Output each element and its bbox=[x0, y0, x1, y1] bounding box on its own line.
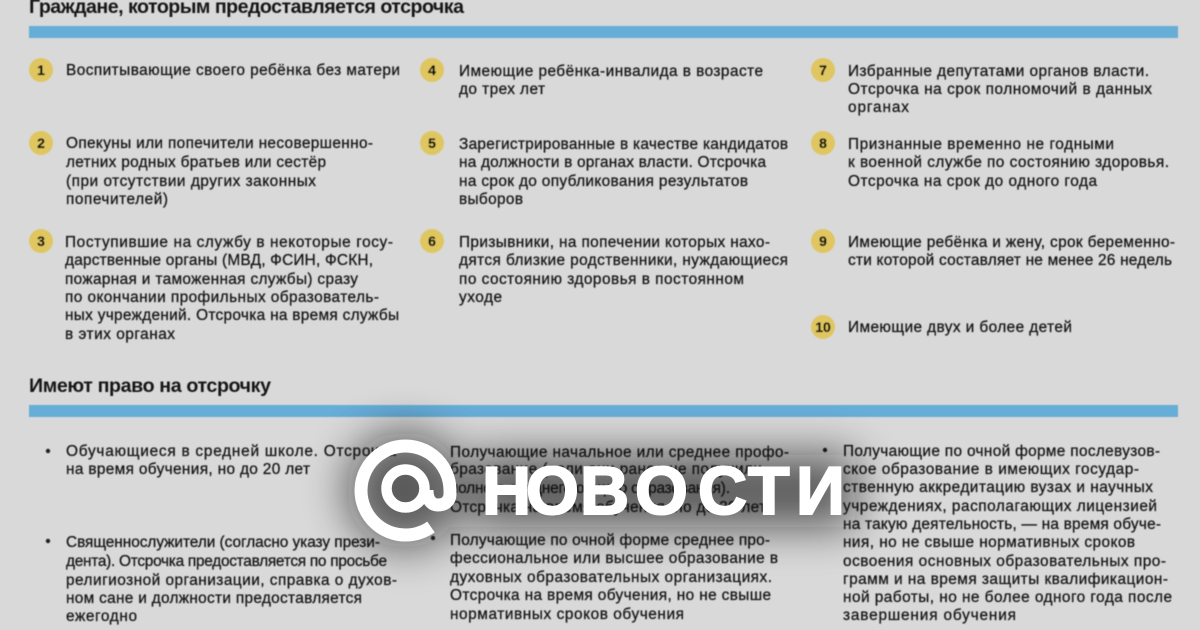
item 5 bbox=[420, 131, 788, 208]
item 8: 8 bbox=[819, 135, 827, 151]
item 5: на срок до опубликования результатов bbox=[459, 173, 748, 190]
bullet: postgraduate: грамм и на время защиты квалификацион- bbox=[843, 571, 1168, 588]
bullet: clergy bbox=[46, 534, 397, 625]
bullet: clergy: ном сане и должности предоставляется bbox=[66, 590, 362, 607]
item 4: до трех лет bbox=[459, 81, 545, 98]
item 2: Опекуны или попечители несовершенно- bbox=[66, 135, 373, 152]
blue bar middle bbox=[29, 405, 1178, 417]
item 4: 4 bbox=[428, 62, 436, 78]
item 9: 9 bbox=[819, 233, 827, 249]
item 6: дятся близкие родственники, нуждающиеся bbox=[459, 252, 788, 269]
bullet: vocational students: бразование (если они ранее не получили bbox=[450, 461, 762, 478]
item 1: 1 bbox=[37, 62, 45, 78]
item 3: Поступившие на службу в некоторые госу- bbox=[65, 234, 393, 251]
item 7: Избранные депутатами органов власти. bbox=[848, 63, 1149, 80]
blue bar top bbox=[29, 26, 1178, 38]
item 6: уходе bbox=[459, 289, 502, 306]
item 10 bbox=[811, 315, 1072, 339]
item 2 bbox=[29, 131, 373, 208]
item 8: к военной службе по состоянию здоровья. bbox=[848, 154, 1169, 171]
bullet: vocational students: Получающие начальное или среднее профо- bbox=[450, 444, 789, 461]
logo shadow bbox=[347, 432, 855, 548]
item 1: Воспитывающие своего ребёнка без матери bbox=[66, 62, 400, 79]
icon: at sign bbox=[361, 446, 450, 535]
item 6: Призывники, на попечении которых нахо- bbox=[459, 234, 770, 251]
item 1 bbox=[29, 58, 400, 82]
bullet: vocational students: полного среднего общего образования). bbox=[450, 480, 730, 497]
item 5: на должности в органах власти. Отсрочка bbox=[459, 154, 766, 171]
item 9: сти которой составляет не менее 26 недель bbox=[848, 252, 1172, 269]
bullet: postgraduate: ственную аккредитацию вузах и научных bbox=[843, 479, 1153, 496]
bullet: full-time higher education: Отсрочка на время обучения, но не свыше bbox=[450, 587, 771, 604]
item 3 bbox=[29, 229, 399, 343]
item 2: летних родных братьев или сестёр bbox=[66, 154, 326, 171]
bullet: postgraduate: ния, но не свыше нормативных сроков bbox=[843, 534, 1135, 551]
item 5: 5 bbox=[428, 135, 436, 151]
item 9 bbox=[811, 229, 1175, 269]
bullet: full-time higher education: нормативных сроков обучения bbox=[450, 606, 684, 623]
item 4 bbox=[420, 58, 763, 98]
item 3: ных учреждений. Отсрочка на время службы bbox=[65, 307, 399, 324]
logo: @ новости bbox=[361, 446, 845, 535]
bullet: full-time higher education: Получающие по очной форме среднее про- bbox=[450, 532, 770, 549]
bullet: clergy: дента). Отсрочка предоставляется по просьбе bbox=[66, 553, 387, 570]
item 10: 10 bbox=[815, 319, 831, 335]
bullet: postgraduate: учреждениях, располагающих лицензией bbox=[843, 498, 1157, 515]
item 8 bbox=[811, 131, 1169, 190]
wordmark: НОВОСТИ bbox=[482, 453, 845, 529]
item 2: 2 bbox=[37, 135, 45, 151]
item 10: Имеющие двух и более детей bbox=[848, 319, 1072, 336]
bullet: postgraduate: на такую деятельность, — на время обуче- bbox=[843, 516, 1161, 533]
bullet: school students: Обучающиеся в средней школе. Отсрочка bbox=[66, 443, 396, 460]
bullet: full-time higher education: духовных образовательных организациях. bbox=[450, 569, 772, 586]
item 3: пожарная и таможенная службы) сразу bbox=[65, 271, 358, 288]
item 3: дарственные органы (МВД, ФСИН, ФСКН, bbox=[65, 252, 373, 269]
item 8: Отсрочка на срок до одного года bbox=[848, 173, 1097, 190]
item 6: по состоянию здоровья в постоянном bbox=[459, 271, 744, 288]
item 6: 6 bbox=[428, 233, 436, 249]
item 3: 3 bbox=[37, 233, 45, 249]
list: numbered items bbox=[29, 58, 1175, 343]
bullet: school students bbox=[46, 443, 396, 478]
bullet: vocational students: Отсрочка на время обучения, но до 20 лет bbox=[450, 499, 766, 516]
bullet: postgraduate: Получающие по очной форме послевузов- bbox=[843, 443, 1160, 460]
item 5: выборов bbox=[459, 191, 523, 208]
bullet: full-time higher education: фессиональное или высшее образование в bbox=[450, 550, 778, 567]
item 7: органах bbox=[848, 99, 909, 116]
item 4: Имеющие ребёнка-инвалида в возрасте bbox=[459, 63, 763, 80]
bullet: postgraduate: ной работы, но не более одного года после bbox=[843, 589, 1172, 606]
item 7: Отсрочка на срок полномочий в данных bbox=[848, 81, 1152, 98]
item 7 bbox=[811, 58, 1152, 116]
bullet: postgraduate: ское образование в имеющих государ- bbox=[843, 461, 1139, 478]
item 8: Признанные временно не годными bbox=[848, 136, 1114, 153]
bullet: postgraduate: освоения основных образовательных про- bbox=[843, 553, 1166, 570]
bullet: vocational students bbox=[450, 444, 789, 516]
bullet: clergy: Священнослужители (согласно указу прези- bbox=[66, 534, 380, 551]
item 3: в этих органах bbox=[65, 326, 175, 343]
item 2: (при отсутствии других законных bbox=[66, 173, 316, 190]
list: bullet items bbox=[46, 443, 1172, 625]
heading: right to deferment: Имеют право на отсрочку bbox=[29, 375, 271, 397]
item 9: Имеющие ребёнка и жену, срок беременно- bbox=[848, 234, 1175, 251]
item 3: по окончании профильных образователь- bbox=[65, 289, 379, 306]
item 7: 7 bbox=[819, 62, 827, 78]
bullet: full-time higher education bbox=[431, 532, 778, 623]
bullet: postgraduate bbox=[823, 443, 1172, 624]
bullet: school students: на время обучения, но до 20 лет bbox=[66, 461, 310, 478]
bullet: clergy: религиозной организации, справка о духов- bbox=[66, 572, 397, 589]
item 2: попечителей) bbox=[66, 191, 168, 208]
bullet: postgraduate: завершения обучения bbox=[843, 607, 1016, 624]
bullet: clergy: ежегодно bbox=[66, 608, 137, 625]
item 6 bbox=[420, 229, 788, 306]
item 5: Зарегистрированные в качестве кандидатов bbox=[459, 136, 788, 153]
